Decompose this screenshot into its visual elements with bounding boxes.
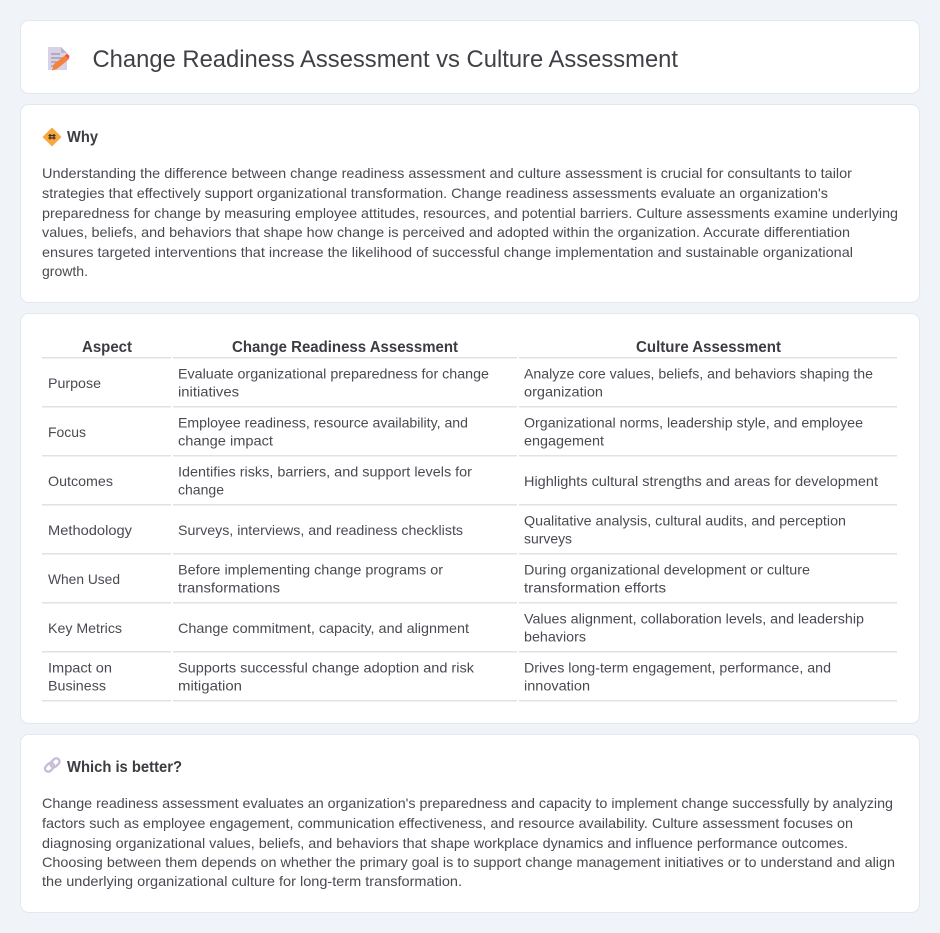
table row: impact on business: Drives long-term engagement, performance, and xyxy=(524,660,831,676)
text block: why paragraph: preparedness for change by measuring employee attitudes, resources, and potential barriers. Culture assessments examine underlying xyxy=(42,205,898,221)
table row: methodology: Surveys, interviews, and readiness checklists xyxy=(178,522,463,538)
text block: which is better paragraph: diagnosing organizational values, beliefs, and behaviors that shape workplace dynamics and influence performance outcomes. xyxy=(42,835,848,851)
title: Change Readiness Assessment vs Culture Assessment xyxy=(92,46,678,73)
table row: key metrics: Key Metrics xyxy=(48,620,122,636)
table row: impact on business xyxy=(42,660,897,702)
panel: header xyxy=(20,20,920,94)
text block: which is better paragraph: the underlying organizational culture for long-term transformation. xyxy=(42,873,462,889)
table row: impact on business: Supports successful change adoption and risk xyxy=(178,660,475,676)
table row: outcomes: Identifies risks, barriers, and support levels for xyxy=(178,464,472,480)
table row: purpose: initiatives xyxy=(178,384,239,400)
table row: methodology: Qualitative analysis, cultural audits, and perception xyxy=(524,512,846,528)
table row: focus: engagement xyxy=(524,432,604,448)
table row: purpose: Purpose xyxy=(48,375,101,391)
table row: purpose: organization xyxy=(524,384,603,400)
text block: why paragraph: Understanding the difference between change readiness assessment and culture assessment is crucial for consultants to tailor xyxy=(42,165,852,181)
table row: key metrics: behaviors xyxy=(524,628,586,644)
table row: outcomes: Highlights cultural strengths and areas for development xyxy=(524,473,878,489)
table row: focus xyxy=(42,414,897,456)
table row: methodology: Methodology xyxy=(48,522,132,538)
table row: focus: change impact xyxy=(178,432,273,448)
text block: why paragraph: growth. xyxy=(42,263,88,279)
table row: outcomes: change xyxy=(178,482,224,498)
text block: why paragraph xyxy=(42,165,898,279)
table row: when used xyxy=(42,562,897,604)
text block: which is better paragraph xyxy=(42,795,895,889)
text block: why paragraph: strategies that effectively support organizational transformation. Change readiness assessments evaluate an organization's xyxy=(42,185,828,201)
text block: why paragraph: values, beliefs, and behaviors that shape how change is perceived and adopted within the organization. Accurate differentiation xyxy=(42,224,850,240)
table row: when used: transformations xyxy=(178,580,280,596)
table row: impact on business: Impact on xyxy=(48,660,112,676)
table row: key metrics: Change commitment, capacity, and alignment xyxy=(178,620,469,636)
table row: key metrics xyxy=(42,610,897,652)
table header row: Change Readiness Assessment xyxy=(232,339,459,356)
panel: comparison table xyxy=(20,314,920,724)
table header row: Culture Assessment xyxy=(636,339,782,356)
panel: which is better xyxy=(20,734,920,912)
table row: purpose xyxy=(42,366,897,408)
heading: why: Why xyxy=(67,129,98,146)
table row: when used: Before implementing change programs or xyxy=(178,562,443,578)
table row: impact on business: innovation xyxy=(524,678,590,694)
table row: methodology xyxy=(42,512,897,554)
table row: when used: transformation efforts xyxy=(524,580,666,596)
table row: methodology: surveys xyxy=(524,530,572,546)
icon: link xyxy=(44,757,61,773)
table row: when used: During organizational development or culture xyxy=(524,562,810,578)
table row: when used: When Used xyxy=(48,571,120,587)
icon: warning diamond xyxy=(44,128,60,146)
text block: which is better paragraph: Change readiness assessment evaluates an organization's preparedness and capacity to implement change successfully by analyzing xyxy=(42,795,893,811)
table row: purpose: Analyze core values, beliefs, and behaviors shaping the xyxy=(524,366,873,382)
text block: which is better paragraph: Choosing between them depends on whether the primary goal is to support change management initiatives or to understand and align xyxy=(42,854,895,870)
table row: focus: Organizational norms, leadership style, and employee xyxy=(524,414,863,430)
table row: outcomes xyxy=(42,464,897,506)
text block: which is better paragraph: factors such as employee engagement, communication effectiveness, and resource availability. Culture assessment focuses on xyxy=(42,815,853,831)
table row: key metrics: Values alignment, collaboration levels, and leadership xyxy=(524,610,864,626)
table row: outcomes: Outcomes xyxy=(48,473,113,489)
table row: purpose: Evaluate organizational preparedness for change xyxy=(178,366,489,382)
table header row xyxy=(42,339,897,358)
table row: impact on business: Business xyxy=(48,678,106,694)
text block: why paragraph: ensures targeted interventions that increase the likelihood of successful change implementation and sustainable organizational xyxy=(42,244,853,260)
heading: which is better: Which is better? xyxy=(67,759,182,776)
table row: focus: Focus xyxy=(48,424,86,440)
icon: memo with pencil xyxy=(48,47,70,70)
panel: why xyxy=(20,104,920,302)
table row: focus: Employee readiness, resource availability, and xyxy=(178,414,468,430)
table row: impact on business: mitigation xyxy=(178,678,242,694)
table header row: Aspect xyxy=(82,339,133,356)
